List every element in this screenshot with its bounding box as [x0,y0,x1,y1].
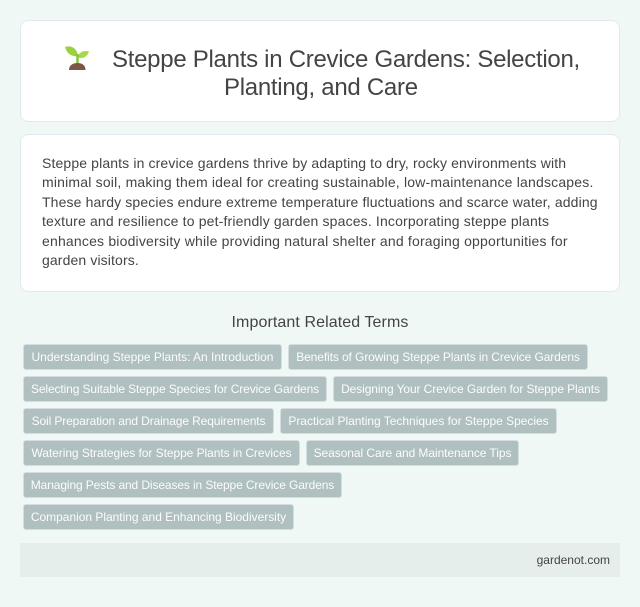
title: Steppe Plants in Crevice Gardens: Selection, [112,46,580,73]
tag 4: Designing Your Crevice Garden for Steppe Plants [341,382,600,396]
title [112,46,580,101]
tag 7: Watering Strategies for Steppe Plants in Crevices [31,446,292,460]
tag 9: Managing Pests and Diseases in Steppe Crevice Gardens [31,478,334,492]
tag 7 [23,440,300,466]
title: Planting, and Care [224,74,418,101]
tag list [23,344,608,530]
text: description: minimal soil, making them ideal for creating sustainable, low-maintenance landscapes. [42,174,594,190]
tag 5 [23,408,274,434]
tag 1: Understanding Steppe Plants: An Introduction [32,350,273,364]
panel: title card [20,20,620,122]
tag 4 [333,376,608,402]
tag 3 [23,376,327,402]
tag 1 [23,344,282,370]
text: description: Steppe plants in crevice gardens thrive by adapting to dry, rocky environments with [42,154,566,170]
text: description: garden visitors. [42,252,139,268]
footer bar [20,543,620,577]
tag 6 [280,408,557,434]
text: description: These hardy species endure extreme temperature fluctuations and scarce water, adding [42,194,598,210]
tag 10: Companion Planting and Enhancing Biodiversity [31,510,286,524]
tag 10 [23,504,294,530]
tag 6: Practical Planting Techniques for Steppe Species [288,414,549,428]
tag 3: Selecting Suitable Steppe Species for Crevice Gardens [31,382,319,396]
tag 8 [306,440,519,466]
icon: seedling [65,46,89,70]
footer source text: gardenot.com [537,553,610,567]
tag 5: Soil Preparation and Drainage Requirements [32,414,265,428]
tag 9 [23,472,342,498]
panel: description card [20,134,620,292]
tag 2: Benefits of Growing Steppe Plants in Crevice Gardens [296,350,580,364]
heading: related terms: Important Related Terms [232,314,408,331]
tag 8: Seasonal Care and Maintenance Tips [314,446,511,460]
text: description: texture and resilience to pet-friendly garden spaces. Incorporating steppe plants [42,213,549,229]
text: description [42,154,598,268]
tag 2 [288,344,588,370]
text: description: enhances biodiversity while providing natural shelter and foraging opportunities for [42,233,568,249]
